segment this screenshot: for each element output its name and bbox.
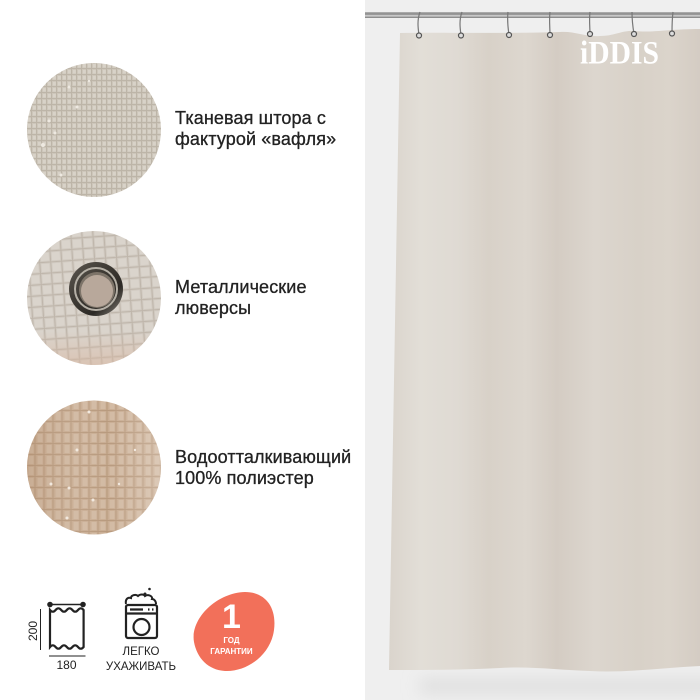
circle photo: waffle fabric <box>27 63 161 197</box>
icon: curtain dimensions <box>26 602 86 672</box>
text: waffle fabric <box>175 108 336 150</box>
text: easy care: ЛЕГКО <box>123 646 159 658</box>
text: waffle fabric: фактурой «вафля» <box>175 129 336 149</box>
eyelet <box>69 262 123 316</box>
height label: 200 <box>26 621 40 641</box>
warranty number: 1 <box>222 598 241 636</box>
badge: 1 year warranty <box>194 592 274 671</box>
floor shadow <box>420 678 700 694</box>
text: metal eyelets: Металлические <box>175 277 307 297</box>
curtain fabric <box>389 29 700 671</box>
curtain rings and eyelets <box>416 12 674 38</box>
text: easy care <box>106 646 176 672</box>
highlights on waffle <box>41 80 90 176</box>
text: water repellent polyester: Водоотталкивающий <box>175 447 351 467</box>
icon: washing machine <box>124 588 158 640</box>
text: waffle fabric: Тканевая штора с <box>175 108 326 128</box>
text: easy care: УХАЖИВАТЬ <box>106 660 176 672</box>
logo: IDDIS: iDDIS <box>580 36 659 72</box>
width label: 180 <box>56 658 77 672</box>
text: metal eyelets: люверсы <box>175 298 251 318</box>
warranty caption <box>210 636 253 656</box>
highlights on fabric <box>50 410 136 520</box>
warranty caption: ГОД <box>223 636 240 645</box>
circle photo: metal eyelet <box>27 231 161 365</box>
text: metal eyelets <box>174 277 307 318</box>
text: water repellent polyester: 100% полиэстер <box>175 468 314 488</box>
panel: curtain photo <box>365 0 700 700</box>
text: water repellent polyester <box>175 447 351 488</box>
circle photo: polyester fabric <box>27 400 161 534</box>
curtain rod <box>365 12 700 18</box>
warranty caption: ГАРАНТИИ <box>210 647 253 656</box>
